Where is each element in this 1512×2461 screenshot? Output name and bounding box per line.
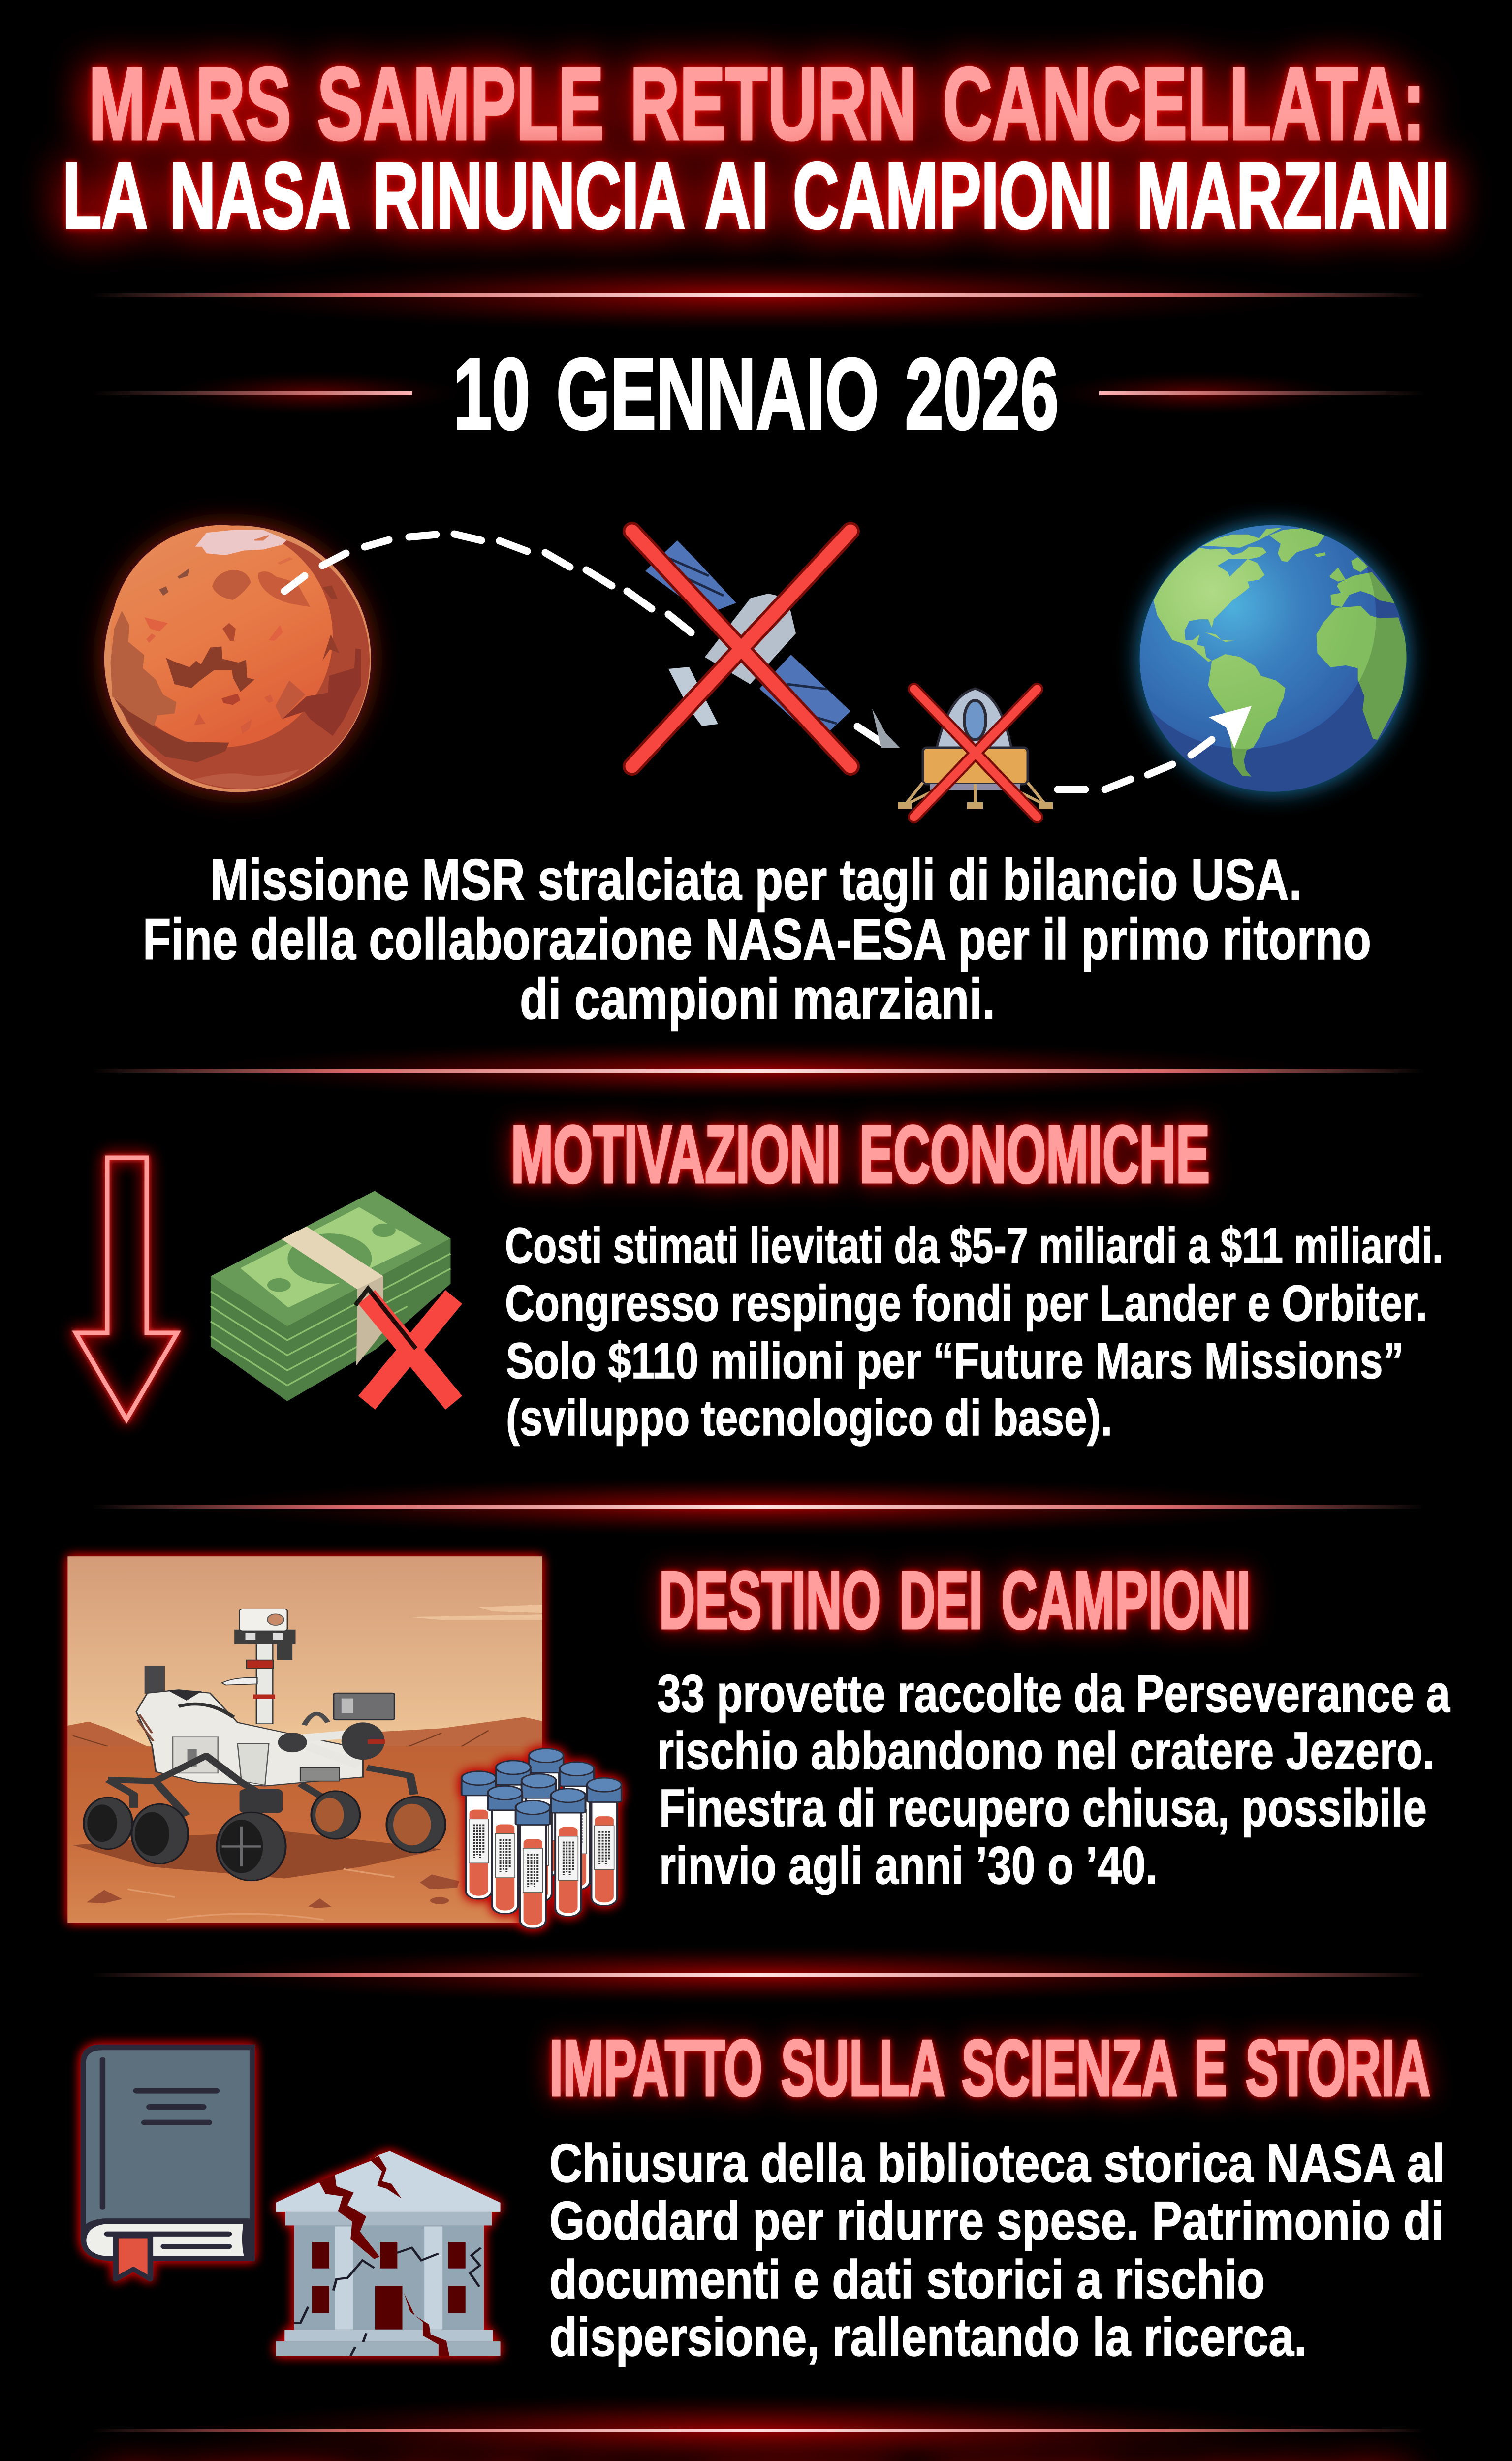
arrowhead — [1209, 706, 1252, 748]
red cross — [914, 689, 1037, 817]
satellite — [645, 540, 850, 742]
lander — [872, 689, 1053, 809]
body — [136, 1690, 363, 1786]
illustration: rover on Mars — [67, 1556, 542, 1923]
title — [63, 47, 1449, 248]
icon: orbiter satellite crossed out — [632, 531, 850, 766]
body text — [549, 2133, 1445, 2367]
intro text — [143, 848, 1371, 1032]
icon: Mars — [104, 525, 371, 792]
body text: rinvio agli anni ’30 o ’40. — [659, 1835, 1158, 1895]
body text — [657, 1664, 1450, 1895]
body text: (sviluppo tecnologico di base). — [506, 1389, 1112, 1446]
icon: Earth — [1112, 484, 1407, 792]
date text: 10 GENNAIO 2026 — [453, 338, 1059, 450]
icon: money stack — [211, 1191, 450, 1401]
icon: cracked building — [276, 2151, 501, 2356]
icon: red X — [355, 1289, 454, 1403]
suspension — [108, 1756, 414, 1816]
mast — [256, 1644, 273, 1724]
arrow: dashed trajectory — [284, 534, 1252, 789]
date — [92, 338, 1425, 450]
panel: motivazioni economiche — [76, 1109, 1443, 1446]
red cross — [632, 531, 850, 766]
intro text: di campioni marziani. — [520, 967, 995, 1032]
icon: down arrow — [76, 1158, 177, 1420]
panel: destino dei campioni — [67, 1555, 1450, 1928]
panel: impatto — [81, 2024, 1445, 2367]
body text — [505, 1217, 1443, 1446]
body text: documenti e dati storici a rischio — [549, 2249, 1265, 2310]
icon: lander crossed out — [872, 689, 1053, 817]
wheels — [84, 1798, 132, 1849]
body text: dispersione, rallentando la ricerca. — [549, 2307, 1307, 2367]
icon: sample tubes — [462, 1749, 622, 1928]
robot arm — [334, 1693, 394, 1720]
icon: book — [81, 2045, 255, 2279]
RTG — [145, 1666, 165, 1694]
